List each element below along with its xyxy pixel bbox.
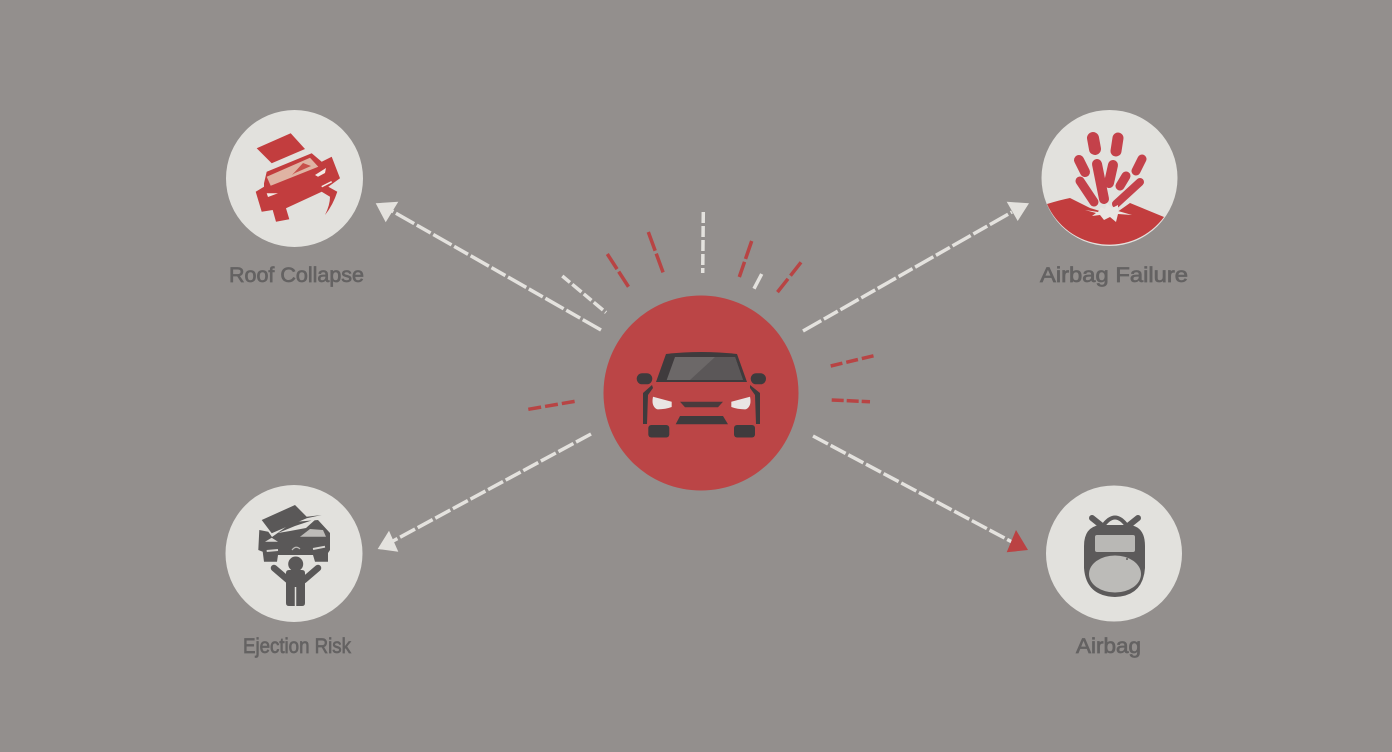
icon: crushed red car <box>256 133 340 222</box>
arrow: center to ejection risk <box>378 434 591 552</box>
panel: airbag <box>1046 486 1182 658</box>
icon: burst with red fingers <box>1047 138 1164 245</box>
label: ejection risk: Ejection Risk <box>243 635 351 658</box>
arrow: center to airbag failure <box>803 202 1029 331</box>
icon: airbag module <box>1084 518 1145 597</box>
icon: person under car <box>258 505 330 606</box>
panel: airbag failure <box>1040 110 1188 287</box>
central red circle with car <box>604 296 798 490</box>
arrow: center to roof collapse <box>376 202 601 330</box>
arrow: center to airbag <box>813 436 1028 552</box>
panel: roof collapse <box>226 110 364 287</box>
label: airbag: Airbag <box>1076 635 1141 658</box>
label: airbag failure: Airbag Failure <box>1040 264 1188 287</box>
impact rays <box>528 212 877 409</box>
label: roof collapse: Roof Collapse <box>229 264 364 287</box>
panel: ejection risk <box>226 485 362 658</box>
icon: front view car <box>637 352 766 438</box>
